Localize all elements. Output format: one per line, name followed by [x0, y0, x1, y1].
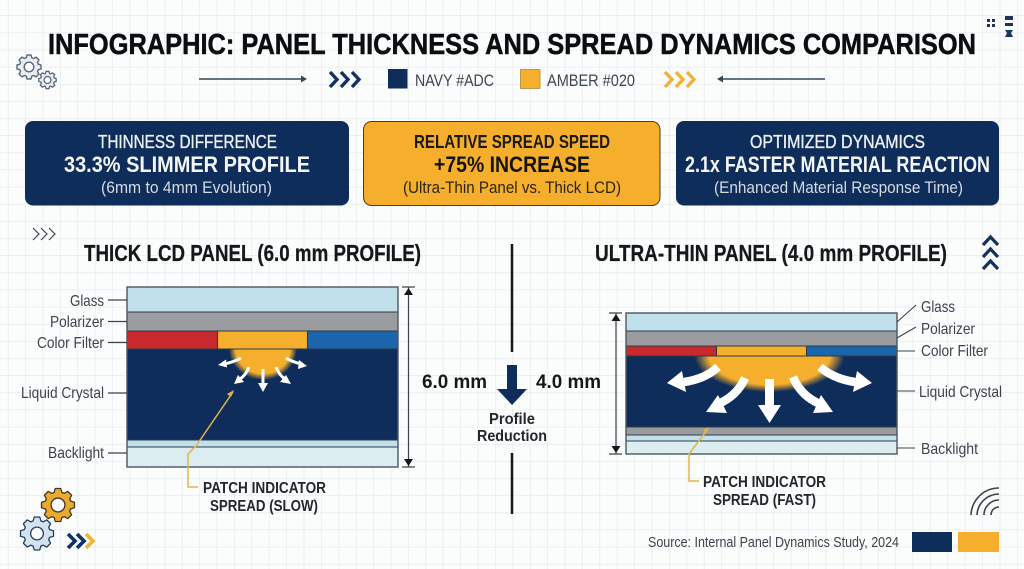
heading: thick panel: THICK LCD PANEL (6.0 mm PROFILE): [84, 240, 421, 266]
dimension: 6 mm bracket: [402, 287, 415, 467]
heading: ultra-thin panel: ULTRA-THIN PANEL (4.0 mm PROFILE): [595, 240, 947, 266]
layer: glass: [626, 313, 897, 331]
label: polarizer: [897, 321, 976, 338]
arrows: fast spread: [667, 367, 872, 423]
layer: liquid crystal: [127, 349, 398, 440]
label: color filter: [897, 343, 989, 360]
icon: up chevrons: [983, 237, 998, 269]
callout: slow spread: SPREAD (SLOW): [210, 498, 318, 515]
legend: amber: AMBER #020: [547, 71, 635, 90]
panel: optimized dynamics: OPTIMIZED DYNAMICS: [750, 131, 925, 152]
icon: navy chevrons: [330, 72, 359, 87]
layer: backlight: [626, 435, 897, 454]
label: backlight: Backlight: [921, 441, 978, 458]
panel: thinness difference: 33.3% SLIMMER PROFILE: [64, 152, 310, 177]
label: backlight: [897, 441, 978, 458]
label: liquid crystal: [897, 384, 1002, 401]
icon: amber chevrons: [665, 72, 694, 87]
panel: optimized dynamics: [676, 121, 999, 206]
panel: thinness difference: THINNESS DIFFERENCE: [98, 131, 277, 152]
labels: thick panel layers: [21, 293, 127, 462]
layer: polarizer: [626, 331, 897, 346]
chart: ultra-thin layer stack: [626, 313, 897, 454]
label: color filter: Color Filter: [37, 335, 105, 352]
layer: glass: [127, 287, 398, 312]
label: backlight: Backlight: [48, 445, 104, 462]
icon: top right marks: [987, 16, 1013, 37]
label: glass: Glass: [921, 299, 955, 316]
label: liquid crystal: Liquid Crystal: [21, 385, 104, 402]
panel: relative spread speed: (Ultra-Thin Panel vs. Thick LCD): [403, 179, 621, 197]
label: polarizer: Polarizer: [921, 321, 976, 338]
legend swatch: amber: [958, 532, 999, 552]
icon: bottom chevrons: [68, 534, 93, 548]
icon: small chevrons left: [33, 228, 55, 240]
text: profile reduction: [477, 411, 547, 445]
value: 4.0 mm: 4.0 mm: [536, 372, 601, 393]
callout: fast spread: SPREAD (FAST): [713, 492, 816, 509]
arrow: legend right pointing: [199, 76, 307, 82]
label: glass: [897, 299, 955, 322]
icon: gears top left: [17, 55, 56, 89]
arrow: legend left pointing: [717, 76, 825, 82]
legend: amber: [520, 70, 635, 90]
legend row: [199, 69, 825, 90]
layer: lower gray: [626, 427, 897, 435]
panel: thinness difference: [25, 121, 349, 206]
label: glass: Glass: [70, 293, 104, 310]
icon: amber gear: [42, 488, 74, 522]
text: profile reduction: Reduction: [477, 428, 547, 445]
value: 6.0 mm: 6.0 mm: [422, 372, 487, 393]
source note: Source: Internal Panel Dynamics Study, 2024: [648, 534, 899, 551]
patch spread glow: [230, 350, 296, 380]
layer: polarizer: [127, 312, 398, 331]
label: liquid crystal: Liquid Crystal: [919, 384, 1002, 401]
panel: optimized dynamics: (Enhanced Material Response Time): [714, 179, 963, 197]
dimension: 4 mm bracket: [609, 313, 622, 454]
callout: fast spread: [689, 427, 826, 509]
patch spread glow: [695, 356, 844, 392]
arrow: profile reduction: [497, 365, 527, 405]
label: polarizer: Polarizer: [50, 314, 105, 331]
legend swatch: navy: [912, 532, 952, 552]
legend: navy: NAVY #ADC: [415, 71, 494, 90]
label: color filter: Color Filter: [921, 343, 989, 360]
divider: center: [511, 244, 513, 514]
layer: backlight: [127, 440, 398, 467]
text: profile reduction: Profile: [489, 411, 535, 428]
legend: navy: [388, 69, 494, 90]
layer: color filter: [127, 331, 398, 349]
panel: relative spread speed: [364, 122, 660, 206]
chart: thick LCD layer stack: [127, 287, 398, 467]
panel: thinness difference: (6mm to 4mm Evolution): [101, 179, 272, 197]
arrows: slow spread: [218, 358, 307, 392]
panel: relative spread speed: RELATIVE SPREAD SPEED: [414, 131, 610, 152]
layer: color filter: [626, 346, 897, 356]
panel: relative spread speed: +75% INCREASE: [434, 152, 590, 177]
callout: fast spread: PATCH INDICATOR: [703, 474, 826, 491]
icon: blue gear: [20, 517, 54, 550]
icon: signal arcs: [971, 488, 999, 515]
callout: slow spread: PATCH INDICATOR: [203, 480, 326, 497]
layer: liquid crystal: [626, 356, 897, 427]
callout: slow spread: [188, 390, 326, 515]
labels: ultra-thin layers: [897, 299, 1002, 458]
